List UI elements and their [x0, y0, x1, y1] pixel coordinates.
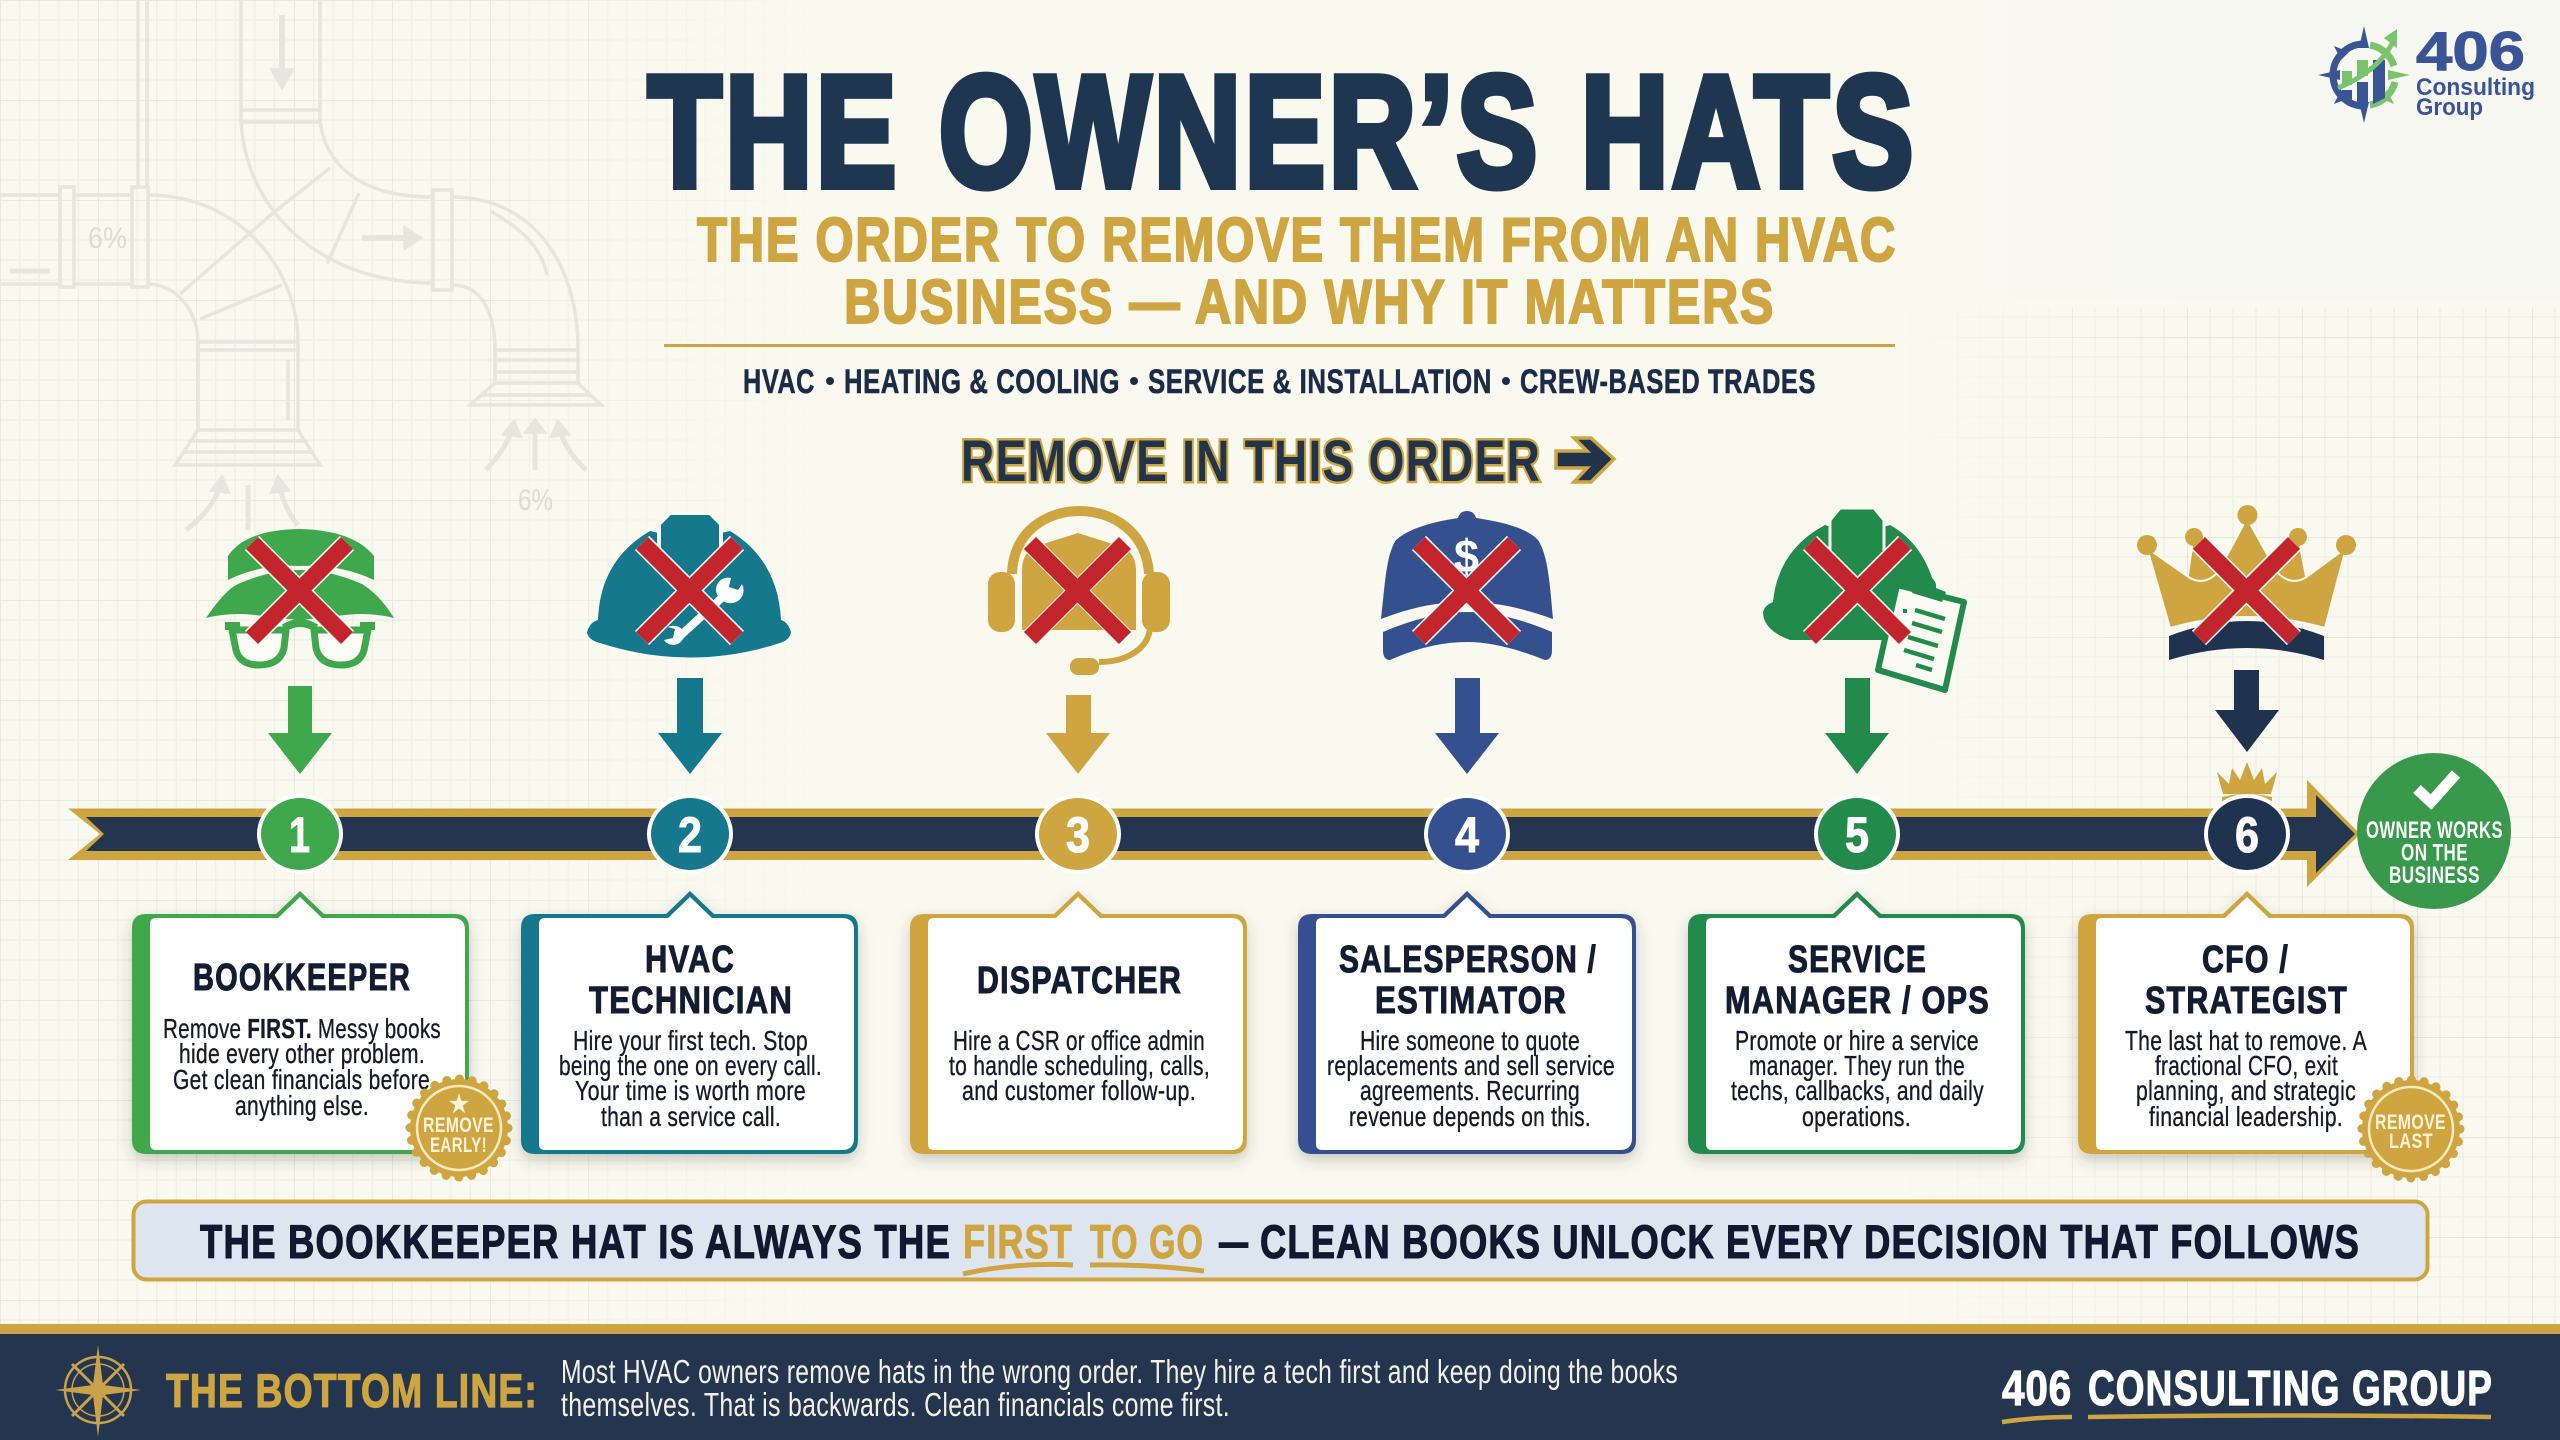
key message banner: [134, 1202, 2428, 1280]
bottom line text one: Most HVAC owners remove hats in the wrong order. They hire a tech first and keep doing the books: [561, 1353, 1678, 1390]
step 6 marker: 6: [2235, 807, 2259, 863]
card title: ESTIMATOR: [1375, 980, 1567, 1022]
card body: The last hat to remove. A: [2125, 1025, 2367, 1056]
step 1 marker: 1: [289, 807, 310, 863]
footer brand number: 406: [2002, 1362, 2072, 1416]
step 5 marker: [1814, 794, 1900, 874]
panel: salesperson card: [1298, 891, 1636, 1154]
card body: being the one on every call.: [559, 1050, 822, 1081]
title: HATS: [1581, 44, 1917, 220]
card body: [1731, 1025, 1984, 1132]
banner dash: —: [1219, 1215, 1249, 1268]
clipboard: [1878, 575, 1964, 690]
step 6 marker: [2204, 794, 2290, 874]
badge: remove early: [410, 1079, 508, 1177]
card body: and customer follow-up.: [962, 1075, 1196, 1106]
step 2 marker: [647, 794, 733, 874]
step 5 marker: 5: [1845, 807, 1869, 863]
icon: compass rose: [55, 1345, 141, 1437]
panel: CFO strategist card: [2078, 891, 2414, 1154]
card title: DISPATCHER: [977, 960, 1182, 1002]
card body: [559, 1025, 822, 1132]
panel: HVAC technician card: [521, 891, 858, 1154]
card body: to handle scheduling, calls,: [949, 1050, 1210, 1081]
subtitle line one: THE ORDER TO REMOVE THEM FROM AN HVAC: [697, 206, 1897, 275]
card body: anything else.: [235, 1090, 369, 1121]
card title: SALESPERSON /: [1339, 939, 1597, 981]
hat 6: CFO crown: [2137, 505, 2356, 660]
card title: STRATEGIST: [2145, 980, 2348, 1022]
card title: HVAC: [645, 939, 735, 981]
card title: BOOKKEEPER: [193, 957, 411, 999]
hat 4: salesperson cap: $: [1454, 530, 1479, 582]
tagline: HEATING & COOLING: [844, 363, 1120, 401]
title: THE: [648, 44, 900, 220]
badge: remove early: ★: [449, 1091, 469, 1118]
card title: SERVICE: [1788, 939, 1927, 981]
card body: Your time is worth more: [575, 1075, 806, 1106]
arrow 1: [268, 686, 332, 774]
logo compass mark: [2318, 26, 2410, 123]
logo number: 406: [2416, 20, 2525, 82]
ghost label 6 percent left: 6%: [88, 222, 127, 255]
tagline: HVAC: [743, 363, 815, 401]
top right background tint: [1950, 0, 2560, 300]
goal text line two: ON THE: [2401, 840, 2468, 866]
step 4 marker: [1424, 794, 1510, 874]
card body: [1327, 1025, 1615, 1132]
end goal circle: [2357, 753, 2511, 909]
card body: than a service call.: [601, 1101, 781, 1132]
footer: [0, 1324, 2560, 1440]
card body: Get clean financials before: [173, 1064, 430, 1095]
arrow 2: [658, 678, 722, 774]
title: OWNER’S: [939, 44, 1541, 220]
tagline: SERVICE & INSTALLATION: [1148, 363, 1492, 401]
small crown above step 6: [2217, 762, 2277, 802]
hat 5: service manager hard hat with clipboard: [1763, 508, 1964, 690]
card body: Remove FIRST. Messy books: [163, 1013, 441, 1044]
card body: Promote or hire a service: [1735, 1025, 1979, 1056]
card body: manager. They run the: [1749, 1050, 1965, 1081]
hat 3: dispatcher headset: [988, 511, 1170, 675]
card body: [2125, 1025, 2367, 1132]
card title: MANAGER / OPS: [1725, 980, 1990, 1022]
arrow 3: [1046, 695, 1110, 774]
step 4 marker: 4: [1455, 807, 1479, 863]
card title: TECHNICIAN: [589, 980, 793, 1022]
card body: [949, 1025, 1210, 1106]
card body: Hire your first tech. Stop: [573, 1025, 808, 1056]
card title: [2145, 939, 2348, 1022]
arrow 4: [1435, 678, 1499, 774]
blueprint grid background left: [0, 0, 687, 1324]
card body: hide every other problem.: [179, 1038, 425, 1069]
logo word consulting: Consulting: [2416, 74, 2535, 101]
remove in this order heading: REMOVE IN THIS ORDER: [961, 429, 1541, 494]
banner highlight to go: TO GO: [1090, 1215, 1204, 1268]
card body: revenue depends on this.: [1349, 1101, 1591, 1132]
badge: remove last: LAST: [2389, 1130, 2433, 1153]
panel: service manager card: [1688, 891, 2025, 1154]
card title: [589, 939, 793, 1022]
panel: dispatcher card: [910, 891, 1247, 1154]
step 2 marker: 2: [678, 807, 702, 863]
goal text line one: OWNER WORKS: [2366, 817, 2503, 844]
panel: bookkeeper card: [132, 891, 469, 1154]
tagline: CREW-BASED TRADES: [1520, 363, 1816, 401]
order arrow: [1556, 438, 1614, 482]
step 3 marker: 3: [1066, 807, 1090, 863]
hat 4: salesperson cap: [1381, 511, 1553, 660]
card body: replacements and sell service: [1327, 1050, 1615, 1081]
card body: fractional CFO, exit: [2155, 1050, 2338, 1081]
badge: remove early: REMOVE: [423, 1114, 494, 1137]
arrow 5: [1825, 678, 1889, 774]
timeline ribbon: [68, 780, 2360, 887]
subtitle line two: BUSINESS — AND WHY IT MATTERS: [844, 268, 1775, 337]
badge: remove last: [2362, 1080, 2460, 1178]
highlight underlines: [963, 1264, 1204, 1274]
card body: financial leadership.: [2149, 1101, 2343, 1132]
card title: CFO /: [2202, 939, 2289, 981]
ghost HVAC ductwork illustration: [0, 0, 601, 530]
card body: techs, callbacks, and daily: [1731, 1075, 1984, 1106]
gold title rule: [664, 344, 1895, 347]
badge: remove early: EARLY!: [430, 1134, 487, 1157]
hat 2: HVAC technician hard hat: [587, 513, 791, 658]
blueprint grid background right: [2002, 308, 2560, 1324]
hat 1: bookkeeper visor and glasses: [206, 529, 394, 665]
step 3 marker: [1035, 794, 1121, 874]
bottom line text two: themselves. That is backwards. Clean financials come first.: [561, 1386, 1230, 1423]
checkmark: [2417, 774, 2456, 802]
card body: Hire someone to quote: [1360, 1025, 1580, 1056]
goal text line three: BUSINESS: [2389, 862, 2480, 889]
step 1 marker: [257, 794, 343, 874]
footer brand underlines: [2002, 1416, 2491, 1422]
ghost label 6 percent right: 6%: [518, 484, 553, 517]
banner text start: THE BOOKKEEPER HAT IS ALWAYS THE: [200, 1215, 951, 1268]
tagline: [743, 363, 1816, 401]
logo: 406 Consulting Group: [2318, 20, 2535, 123]
title: [648, 44, 1917, 220]
badge: remove last: REMOVE: [2375, 1111, 2446, 1134]
card body: planning, and strategic: [2136, 1075, 2356, 1106]
banner highlight first: FIRST: [963, 1215, 1073, 1268]
card body: Hire a CSR or office admin: [953, 1025, 1205, 1056]
card body: operations.: [1802, 1101, 1911, 1132]
card title: [1339, 939, 1597, 1022]
card body: agreements. Recurring: [1360, 1075, 1580, 1106]
card body: [163, 1013, 441, 1121]
card title: [1725, 939, 1990, 1022]
arrow 6: [2215, 670, 2279, 752]
bottom line label: THE BOTTOM LINE:: [166, 1364, 538, 1417]
logo word group: Group: [2416, 94, 2483, 121]
